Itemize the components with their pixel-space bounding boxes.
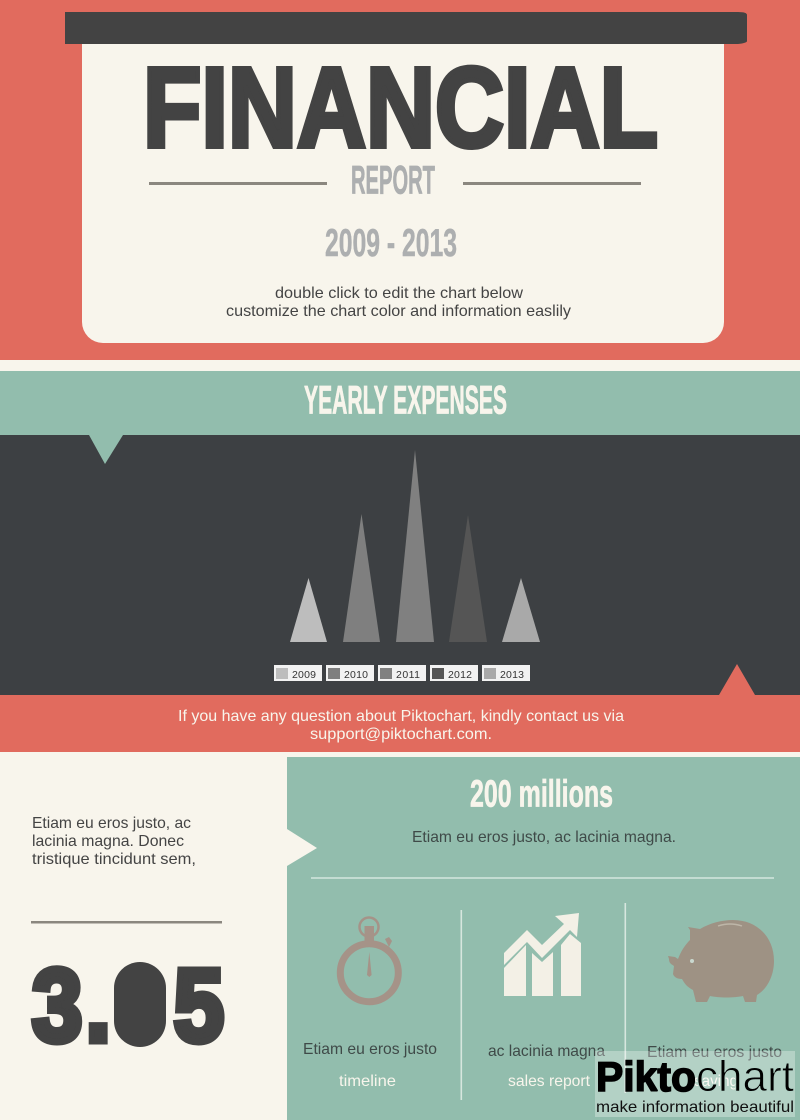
triangle chart: [290, 450, 540, 642]
panel: contact banner: If you have any question about Piktochart, kindly contact us via: [178, 708, 624, 725]
intro text: [226, 285, 571, 320]
column: sales report: [488, 1043, 605, 1090]
header bar: [65, 12, 747, 44]
chart legend: 2012: [448, 669, 472, 681]
panel: right teal: [287, 757, 800, 1120]
pointer: teal: [89, 435, 123, 464]
chart legend: 2013: [500, 669, 524, 681]
date range: 2009 - 2013: [325, 222, 457, 265]
column: sales report: sales report: [508, 1073, 591, 1090]
panel: contact banner: [0, 695, 800, 752]
pointer: cream: [287, 829, 317, 866]
left paragraph: lacinia magna. Donec: [32, 833, 184, 850]
column: timeline: [303, 1041, 437, 1090]
left paragraph: Etiam eu eros justo, ac: [32, 815, 191, 832]
subtitle: report: REPORT: [351, 158, 435, 202]
left paragraph: tristique tincidunt sem,: [32, 851, 196, 868]
column: saving: [647, 1044, 782, 1090]
pointer: red: [719, 664, 755, 695]
icon: stopwatch: [340, 918, 398, 1002]
icon: growth chart: [504, 913, 581, 996]
panel: chart area: [0, 435, 800, 695]
panel: yearly expenses heading: YEARLY EXPENSES: [304, 378, 507, 422]
panel: header: [0, 0, 800, 360]
panel: yearly expenses heading: [0, 371, 800, 435]
watermark: Piktochart logo: make information beautiful: [596, 1099, 794, 1116]
statistic heading: 200 millions: [470, 774, 613, 816]
watermark: Piktochart logo: chart: [696, 1052, 794, 1101]
column: timeline: timeline: [339, 1073, 396, 1090]
chart legend: 2010: [344, 669, 368, 681]
title: FINANCIAL: [143, 44, 658, 170]
column: timeline: Etiam eu eros justo: [303, 1041, 437, 1058]
big number: 3.05: [32, 948, 224, 1063]
panel: left statistic: [31, 815, 224, 1063]
icon: piggy bank: [668, 920, 774, 1002]
watermark: Piktochart logo: [595, 1051, 795, 1117]
watermark: Piktochart logo: Pikto: [596, 1053, 696, 1100]
intro text: customize the chart color and information easlily: [226, 303, 571, 320]
intro text: double click to edit the chart below: [275, 285, 523, 302]
chart legend: 2011: [396, 669, 420, 681]
column: saving: Etiam eu eros justo: [647, 1044, 782, 1061]
panel: contact banner: support@piktochart.com.: [310, 726, 492, 743]
column: sales report: ac lacinia magna: [488, 1043, 605, 1060]
left paragraph: [32, 815, 196, 868]
header card: [82, 40, 724, 343]
column: saving: saving: [694, 1073, 738, 1090]
chart legend: [274, 665, 530, 681]
chart legend: 2009: [292, 669, 316, 681]
subtitle: report: [149, 158, 641, 202]
statistic caption: Etiam eu eros justo, ac lacinia magna.: [412, 829, 676, 846]
